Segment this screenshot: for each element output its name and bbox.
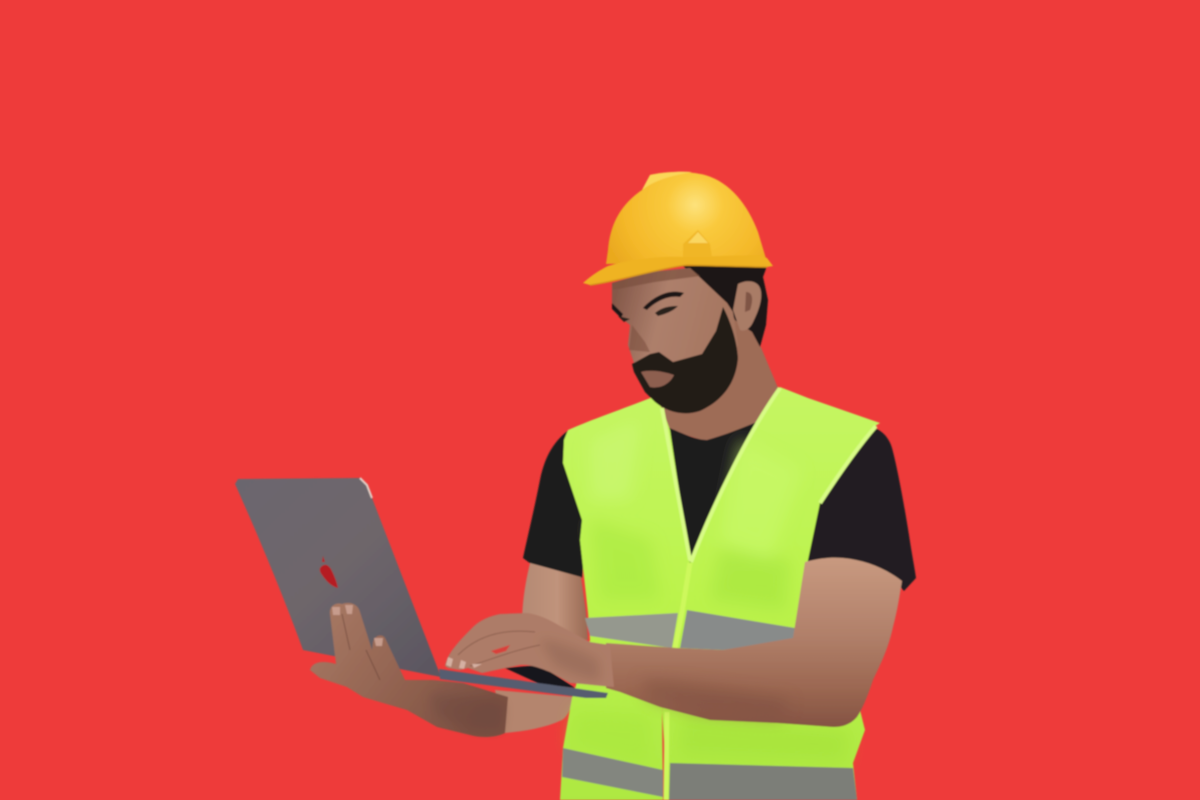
- brim underside: [590, 265, 767, 285]
- right hand typing: [445, 613, 614, 687]
- front tab: [683, 230, 712, 257]
- reflective stripe: chest left: [585, 613, 678, 648]
- laptop base: [439, 669, 608, 698]
- nails: [332, 605, 383, 646]
- vest centre seam: [666, 563, 690, 800]
- brow right: [643, 292, 684, 310]
- face: [612, 268, 738, 405]
- reflective stripe: lower right: [669, 763, 857, 800]
- dome: [606, 172, 767, 264]
- keyboard underside shadow: [505, 665, 575, 688]
- head: [612, 266, 768, 413]
- wrist hair: [540, 640, 600, 680]
- lower left forearm: [495, 690, 574, 733]
- mouth: [641, 371, 674, 387]
- reflective stripe: chest right: [680, 610, 795, 650]
- left hand holding laptop: [310, 603, 508, 737]
- back of hand hair: [430, 694, 505, 731]
- vest right panel: [662, 387, 880, 800]
- brim: [583, 255, 773, 285]
- neck: [660, 310, 778, 442]
- forearm hair shading: [640, 680, 790, 718]
- hair: [683, 266, 768, 347]
- eye left: [618, 316, 630, 322]
- yellow hard hat: [583, 172, 773, 285]
- right arm and forearm: [606, 558, 902, 727]
- upper left arm: [522, 563, 588, 640]
- vest left panel: [560, 397, 690, 800]
- top ridge: [642, 172, 692, 190]
- tab highlight: [688, 232, 708, 243]
- reflective stripe: lower left: [562, 748, 663, 797]
- apple logo: [320, 556, 338, 588]
- eye right: [655, 306, 678, 316]
- shirt chest: [667, 422, 757, 565]
- laptop lid: [235, 478, 441, 677]
- beard: [632, 307, 738, 413]
- shirt right sleeve: [803, 426, 916, 591]
- safety vest: [560, 387, 880, 800]
- shirt left sleeve: [523, 429, 590, 578]
- red gap between fingers: [491, 645, 510, 654]
- fingernails: [446, 657, 482, 669]
- brim shadow on forehead: [612, 268, 700, 290]
- vest fold shading: [570, 420, 850, 765]
- laptop: [235, 478, 441, 677]
- nose shadow: [629, 325, 650, 352]
- brow left: [612, 303, 623, 318]
- finger divide: [342, 614, 380, 680]
- finger lines: [458, 631, 540, 666]
- worker figure: [235, 172, 916, 800]
- ear inner: [745, 292, 752, 312]
- black t-shirt: [523, 422, 916, 591]
- lid bright corner: [360, 478, 372, 498]
- ear: [733, 281, 761, 331]
- vest edge trim: [662, 388, 876, 562]
